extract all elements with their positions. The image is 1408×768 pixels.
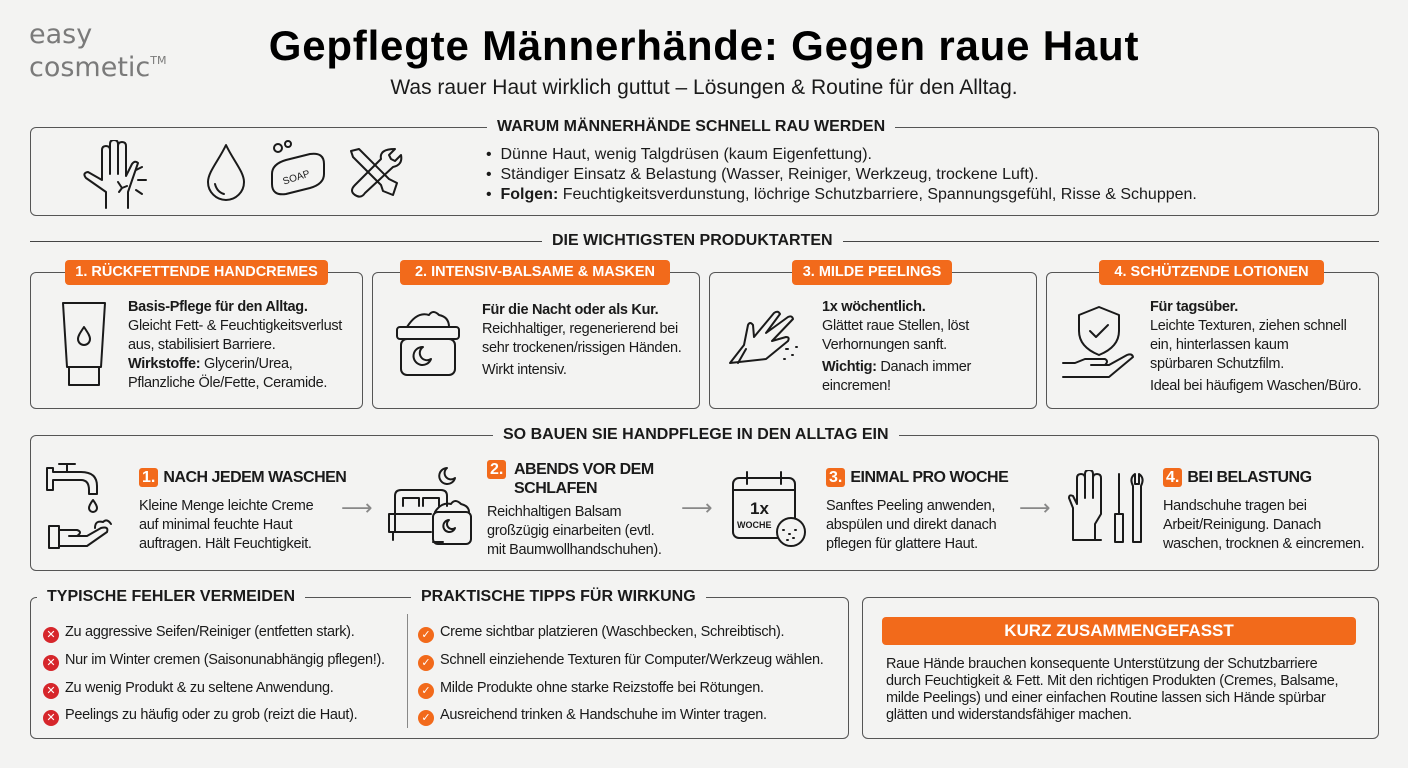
- panel: mistakes and tips: Milde Produkte ohne starke Reizstoffe bei Rötungen.: [440, 680, 764, 696]
- icon: calendar: WOCHE: [737, 520, 772, 530]
- step 3: pflegen für glattere Haut.: [826, 536, 978, 552]
- text: ein, hinterlassen kaum: [1150, 337, 1288, 353]
- step 4: Arbeit/Reinigung. Danach: [1163, 517, 1321, 533]
- icon: cracked hand: [83, 140, 147, 209]
- logo: easy: [29, 19, 92, 50]
- tag: [65, 260, 328, 285]
- text: spürbaren Schutzfilm.: [1150, 356, 1284, 372]
- panel: mistakes and tips: Zu wenig Produkt & zu seltene Anwendung.: [65, 680, 334, 696]
- heading: routine: SO BAUEN SIE HANDPFLEGE IN DEN ALLTAG EIN: [503, 426, 888, 443]
- panel: mistakes and tips: ✓: [421, 656, 431, 669]
- step 4: Handschuhe tragen bei: [1163, 498, 1307, 514]
- step 2: SCHLAFEN: [514, 480, 597, 497]
- step 4: BEI BELASTUNG: [1187, 469, 1312, 486]
- text: causes bullets: [486, 146, 1197, 203]
- text: Verhornungen sanft.: [822, 337, 947, 353]
- step 1: auftragen. Hält Feuchtigkeit.: [139, 536, 312, 552]
- summary text: milde Peelings) und einer einfachen Routine lassen sich Hände spürbar: [886, 690, 1326, 706]
- step 3: 3.: [829, 469, 842, 486]
- text: aus, stabilisiert Barriere.: [128, 337, 275, 353]
- panel: product 3: [709, 272, 1037, 409]
- text: Gleicht Fett- & Feuchtigkeitsverlust: [128, 318, 342, 334]
- text: Für tagsüber.: [1150, 299, 1238, 315]
- step 3: abspülen und direkt danach: [826, 517, 996, 533]
- panel: mistakes and tips: ✕: [46, 711, 56, 724]
- arrow 1: ⟶: [341, 496, 373, 521]
- panel: mistakes and tips: Schnell einziehende Texturen für Computer/Werkzeug wählen.: [440, 652, 823, 668]
- subtitle: Was rauer Haut wirklich guttut – Lösungen & Routine für den Alltag.: [390, 76, 1018, 99]
- tag: 1. RÜCKFETTENDE HANDCREMES: [75, 264, 318, 280]
- panel: mistakes and tips: ✕: [46, 656, 56, 669]
- heading: mistakes: TYPISCHE FEHLER VERMEIDEN: [47, 588, 295, 605]
- icon: water drop: [207, 144, 245, 201]
- step 2: [487, 460, 662, 558]
- divider heading: product types: DIE WICHTIGSTEN PRODUKTARTEN: [552, 232, 833, 249]
- list: mistakes: [43, 624, 385, 726]
- icon: calendar: 1x: [750, 499, 769, 518]
- tag: [792, 260, 952, 285]
- panel: mistakes and tips: Nur im Winter cremen (Saisonunabhängig pflegen!).: [65, 652, 385, 668]
- panel: mistakes and tips: Ausreichend trinken & Handschuhe im Winter tragen.: [440, 707, 767, 723]
- list: tips: [418, 624, 823, 726]
- step 1: 1.: [142, 469, 155, 486]
- text: 1x wöchentlich.: [822, 299, 925, 315]
- text: [822, 299, 972, 394]
- panel: mistakes and tips: Creme sichtbar platzieren (Waschbecken, Schreibtisch).: [440, 624, 784, 640]
- panel: causes: [30, 127, 1379, 216]
- icon: tap: [46, 463, 112, 549]
- summary heading bar: [882, 617, 1356, 645]
- tag: 4. SCHÜTZENDE LOTIONEN: [1114, 264, 1309, 280]
- text: causes bullets: • Ständiger Einsatz & Belastung (Wasser, Reiniger, Werkzeug, trockene Luft).: [486, 166, 1039, 183]
- logo: [29, 19, 166, 83]
- summary text: durch Feuchtigkeit & Fett. Mit den richtigen Produkten (Cremes, Balsame,: [886, 673, 1338, 689]
- text: Wichtig: Danach immer: [822, 359, 971, 375]
- panel: mistakes and tips: ✓: [421, 711, 431, 724]
- icon: soap: [271, 140, 325, 196]
- step 2: ABENDS VOR DEM: [514, 461, 654, 478]
- title: Gepflegte Männerhände: Gegen raue Haut: [269, 22, 1139, 69]
- text: Leichte Texturen, ziehen schnell: [1150, 318, 1346, 334]
- icon: gloves and tools: [1068, 470, 1144, 543]
- step 1: [139, 468, 346, 552]
- step 1: Kleine Menge leichte Creme: [139, 498, 313, 514]
- panel: mistakes and tips: ✓: [421, 628, 431, 641]
- icon: calendar: [732, 471, 806, 547]
- summary text: Raue Hände brauchen konsequente Unterstützung der Schutzbarriere: [886, 656, 1317, 672]
- step 2: mit Baumwollhandschuhen).: [487, 542, 662, 558]
- panel: mistakes and tips: ✕: [46, 684, 56, 697]
- arrow 3: ⟶: [1019, 496, 1051, 521]
- tag: 2. INTENSIV-BALSAME & MASKEN: [415, 264, 655, 280]
- text: Glättet raue Stellen, löst: [822, 318, 969, 334]
- summary text: glätten und widerstandsfähiger machen.: [886, 707, 1132, 723]
- text: Basis-Pflege für den Alltag.: [128, 299, 308, 315]
- step 4: waschen, trocknen & eincremen.: [1163, 536, 1364, 552]
- panel: mistakes and tips: ✕: [46, 628, 56, 641]
- step 3: [826, 468, 1008, 552]
- panel: routine: [30, 435, 1379, 571]
- text: [1150, 299, 1362, 394]
- icon: jar: [396, 311, 460, 376]
- text: eincremen!: [822, 378, 891, 394]
- summary heading bar: KURZ ZUSAMMENGEFASST: [1004, 621, 1234, 640]
- summary text: [886, 656, 1338, 723]
- step 4: [1163, 468, 1364, 552]
- text: Wirkstoffe: Glycerin/Urea,: [128, 356, 292, 372]
- panel: product 1: [30, 272, 363, 409]
- icon: rubbing hands: [729, 310, 798, 364]
- step 2: Reichhaltigen Balsam: [487, 504, 621, 520]
- text: [128, 299, 342, 391]
- step 4: 4.: [1166, 469, 1179, 486]
- step 1: NACH JEDEM WASCHEN: [163, 469, 346, 486]
- text: Reichhaltiger, regenerierend bei: [482, 321, 678, 337]
- logo: cosmeticTM: [29, 52, 166, 83]
- step 3: Sanftes Peeling anwenden,: [826, 498, 995, 514]
- text: causes bullets: • Dünne Haut, wenig Talgdrüsen (kaum Eigenfettung).: [486, 146, 872, 163]
- text: Ideal bei häufigem Waschen/Büro.: [1150, 378, 1362, 394]
- step 2: 2.: [490, 461, 503, 478]
- icon: soap: SOAP: [282, 168, 312, 188]
- tag: [1099, 260, 1324, 285]
- text: sehr trockenen/rissigen Händen.: [482, 340, 681, 356]
- panel: mistakes and tips: ✓: [421, 684, 431, 697]
- step 3: EINMAL PRO WOCHE: [850, 469, 1008, 486]
- icon: bed: [388, 467, 472, 545]
- step 1: auf minimal feuchte Haut: [139, 517, 292, 533]
- text: causes bullets: • Folgen: Feuchtigkeitsverdunstung, löchrige Schutzbarriere, Spannungsgefühl, Risse & Schuppen.: [486, 186, 1197, 203]
- panel: summary: [862, 597, 1379, 739]
- panel: mistakes and tips: [30, 597, 849, 739]
- tag: 3. MILDE PEELINGS: [803, 264, 941, 280]
- panel: mistakes and tips: Zu aggressive Seifen/Reiniger (entfetten stark).: [65, 624, 354, 640]
- icon: tube: [62, 302, 106, 386]
- text: Für die Nacht oder als Kur.: [482, 302, 658, 318]
- text: [482, 302, 681, 378]
- heading: causes: WARUM MÄNNERHÄNDE SCHNELL RAU WERDEN: [497, 118, 885, 135]
- text: Wirkt intensiv.: [482, 362, 567, 378]
- panel: product 4: [1046, 272, 1379, 409]
- icon: shield hand: [1062, 306, 1134, 378]
- panel: mistakes and tips: Peelings zu häufig oder zu grob (reizt die Haut).: [65, 707, 357, 723]
- heading: tips: PRAKTISCHE TIPPS FÜR WIRKUNG: [421, 588, 696, 605]
- icon: tools: [350, 148, 402, 198]
- tag: [400, 260, 670, 285]
- panel: product 2: [372, 272, 700, 409]
- text: Pflanzliche Öle/Fette, Ceramide.: [128, 375, 327, 391]
- step 2: großzügig einarbeiten (evtl.: [487, 523, 654, 539]
- arrow 2: ⟶: [681, 496, 713, 521]
